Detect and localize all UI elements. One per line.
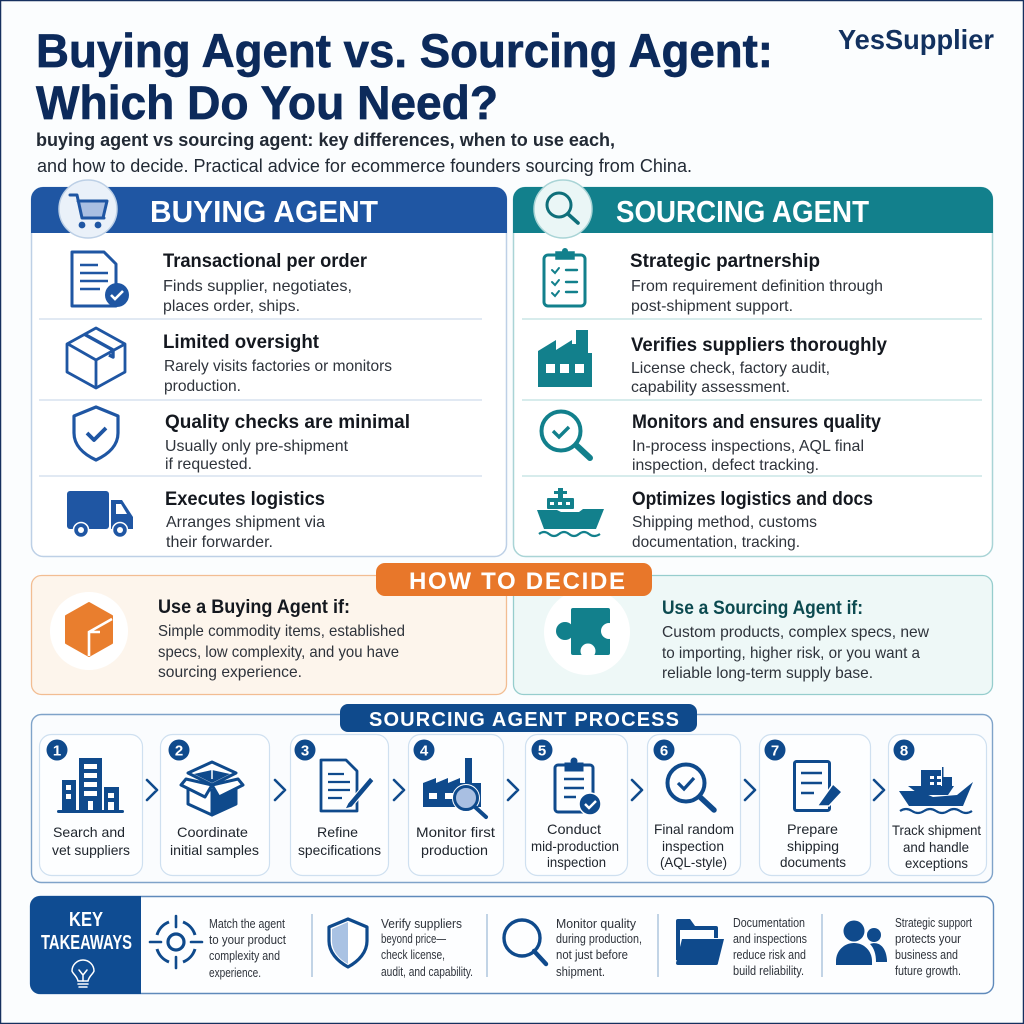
step 7 label: Prepare: [787, 821, 838, 837]
step 5: icon clipboard with check: [555, 758, 601, 815]
subtitle: and how to decide. Practical advice for ecommerce founders sourcing from China.: [37, 155, 692, 176]
panel: key takeaways: [30, 896, 994, 994]
takeaway 4: reduce risk and: [733, 948, 806, 962]
step number badges: 7: [771, 742, 779, 760]
logo: YesSupplier: YesSupplier: [838, 24, 994, 55]
step 7 label: [780, 821, 846, 870]
key takeaways label block: KEY: [69, 909, 104, 931]
takeaway 4: Documentation: [733, 916, 805, 930]
step 4: icon factory and magnifier: [423, 758, 486, 817]
icon: shield with check: [74, 407, 118, 460]
item: limited oversight: Limited oversight: [163, 332, 320, 353]
item: monitors and ensures quality: [632, 412, 881, 474]
title: Which Do You Need?: [36, 76, 498, 129]
takeaway 3: [556, 917, 642, 979]
takeaway 1: to your product: [209, 933, 286, 947]
sourcing agent heading: SOURCING AGENT: [616, 194, 869, 229]
item: executes logistics: Executes logistics: [165, 489, 325, 510]
step 8 label: and handle: [903, 839, 969, 855]
step number badges: 6: [660, 742, 668, 760]
panel: buying agent: [31, 180, 507, 556]
icon: truck: [67, 491, 133, 538]
subtitle: [36, 129, 692, 176]
step 4 label: Monitor first: [416, 824, 495, 840]
item: optimizes logistics and docs: Shipping method, customs: [632, 514, 817, 531]
takeaway 1: Match the agent: [209, 917, 285, 931]
item: transactional per order: [163, 251, 368, 315]
takeaway 2: Verify suppliers: [381, 917, 462, 931]
item: optimizes logistics and docs: [632, 489, 873, 551]
item: executes logistics: their forwarder.: [166, 534, 273, 551]
step 3: icon document and pencil: [321, 760, 374, 811]
item: strategic partnership: From requirement definition through: [631, 278, 883, 295]
icon: cargo ship: [537, 488, 604, 536]
key takeaways label block: TAKEAWAYS: [41, 932, 132, 954]
step number badges: 1: [53, 742, 61, 760]
item: strategic partnership: post-shipment support.: [631, 298, 793, 315]
icon: puzzle piece: [544, 589, 630, 675]
process badge: SOURCING AGENT PROCESS: [369, 709, 679, 731]
takeaway 5: future growth.: [895, 964, 961, 978]
item: strategic partnership: Strategic partnership: [630, 251, 820, 272]
item: quality checks are minimal: Usually only pre-shipment: [165, 438, 349, 455]
takeaway 3: during production,: [556, 932, 642, 946]
step 2 label: [170, 824, 259, 858]
item: verifies suppliers thoroughly: License check, factory audit,: [631, 360, 830, 377]
step 2: icon open box: [181, 762, 243, 815]
buying agent advice: [158, 597, 405, 681]
step 6 label: (AQL-style): [660, 854, 727, 870]
takeaway 1: [209, 917, 286, 980]
takeaway 5: protects your: [895, 932, 961, 946]
buying agent advice: sourcing experience.: [158, 664, 302, 681]
takeaway 4: and inspections: [733, 932, 807, 946]
item: optimizes logistics and docs: documentation, tracking.: [632, 534, 800, 551]
icon: factory: [538, 330, 592, 387]
step number badges: 3: [301, 742, 309, 760]
step 5 label: inspection: [547, 854, 606, 870]
takeaway 2: audit, and capability.: [381, 965, 473, 979]
step 7: icon document and pen: [794, 762, 842, 810]
step cards: [40, 734, 986, 876]
buying agent advice: specs, low complexity, and you have: [158, 644, 399, 661]
step 8 label: [892, 822, 981, 871]
item: verifies suppliers thoroughly: [631, 335, 887, 396]
buying agent advice: Use a Buying Agent if:: [158, 597, 350, 618]
icon: shopping cart: [59, 180, 117, 238]
panel: use a sourcing agent: [514, 576, 992, 694]
item: executes logistics: [165, 489, 325, 551]
step 2 label: Coordinate: [177, 824, 248, 840]
title: Buying Agent vs. Sourcing Agent:: [36, 24, 773, 77]
buying agent heading: BUYING AGENT: [150, 194, 378, 229]
how to decide badge: [376, 563, 652, 596]
takeaway 1: experience.: [209, 966, 261, 980]
step arrows: [147, 780, 884, 800]
step 8 label: exceptions: [905, 855, 968, 871]
item: monitors and ensures quality: inspection, defect tracking.: [632, 457, 819, 474]
panel: sourcing agent: [513, 180, 993, 556]
item: transactional per order: places order, ships.: [163, 298, 300, 315]
step 5 label: Conduct: [547, 821, 601, 837]
process badge: [340, 704, 697, 732]
key takeaways label block: [30, 896, 141, 994]
step 6 label: inspection: [662, 838, 724, 854]
item: executes logistics: Arranges shipment via: [166, 514, 325, 531]
step number badges: [46, 740, 914, 760]
icon: people: [836, 920, 887, 965]
step 2 label: initial samples: [170, 842, 259, 858]
step 4 label: production: [421, 842, 488, 858]
takeaway 2: beyond price—: [381, 932, 446, 946]
item: monitors and ensures quality: In-process inspections, AQL final: [632, 438, 864, 455]
step 1: icon buildings: [57, 758, 124, 813]
step 1 label: [52, 824, 130, 858]
step 7 label: shipping: [787, 838, 839, 854]
item: transactional per order: Transactional per order: [163, 251, 368, 272]
item: limited oversight: Rarely visits factories or monitors: [164, 358, 392, 375]
icon: folder: [676, 919, 724, 965]
icon: quality magnifier: [542, 412, 590, 458]
sourcing agent advice: reliable long-term supply base.: [662, 665, 873, 682]
how to decide badge: HOW TO DECIDE: [409, 568, 625, 595]
sourcing agent header bar: [513, 187, 993, 233]
step 4 label: [416, 824, 495, 858]
takeaway 3: shipment.: [556, 965, 605, 979]
takeaway 3: Monitor quality: [556, 917, 637, 931]
step 1 label: vet suppliers: [52, 842, 130, 858]
step 7 label: documents: [780, 854, 846, 870]
icon: magnifier: [534, 180, 592, 238]
item: quality checks are minimal: Quality checks are minimal: [165, 412, 410, 433]
takeaway 2: check license,: [381, 948, 445, 962]
step 8 label: Track shipment: [892, 822, 981, 838]
takeaway 2: [381, 917, 473, 979]
takeaway 4: [733, 916, 807, 978]
sourcing agent advice: to importing, higher risk, or you want a: [662, 645, 920, 662]
icon: orange box: [50, 592, 128, 670]
item: monitors and ensures quality: Monitors and ensures quality: [632, 412, 881, 433]
icon: magnifier: [504, 920, 546, 964]
buying agent advice: Simple commodity items, established: [158, 623, 405, 640]
step 5 label: [531, 821, 619, 870]
step 1 label: Search and: [53, 824, 125, 840]
step number badges: 5: [538, 742, 546, 760]
step 6 label: [654, 821, 734, 870]
icon: target: [150, 916, 202, 968]
takeaway 4: build reliability.: [733, 964, 804, 978]
icon: clipboard checklist: [544, 248, 585, 306]
item: strategic partnership: [630, 251, 883, 315]
item: verifies suppliers thoroughly: capability assessment.: [631, 379, 790, 396]
step 3 label: [298, 824, 381, 858]
step 6: icon magnifier with check: [668, 764, 714, 810]
step 3 label: Refine: [317, 824, 358, 840]
item: limited oversight: production.: [164, 378, 241, 395]
buying agent header bar: [31, 187, 507, 233]
subtitle: buying agent vs sourcing agent: key differences, when to use each,: [36, 129, 615, 150]
takeaway 3: not just before: [556, 948, 628, 962]
sourcing agent advice: Use a Sourcing Agent if:: [662, 598, 863, 619]
panel: sourcing agent process: [32, 704, 992, 882]
step 6 label: Final random: [654, 821, 734, 837]
item: verifies suppliers thoroughly: Verifies suppliers thoroughly: [631, 335, 887, 356]
icon: light bulb: [72, 960, 94, 987]
takeaway 5: [895, 916, 972, 978]
step 3 label: specifications: [298, 842, 381, 858]
step number badges: 8: [900, 742, 908, 760]
step number badges: 4: [420, 742, 429, 760]
step 8: icon ship: [899, 767, 973, 813]
item: transactional per order: Finds supplier, negotiates,: [163, 278, 352, 295]
icon: box: [67, 328, 125, 388]
step 5 label: mid-production: [531, 838, 619, 854]
item: quality checks are minimal: [165, 412, 410, 473]
icon: shield: [329, 919, 367, 967]
sourcing agent advice: Custom products, complex specs, new: [662, 624, 929, 641]
takeaway 1: complexity and: [209, 949, 280, 963]
item: limited oversight: [163, 332, 392, 395]
title: [36, 24, 773, 129]
icon: document with check: [72, 252, 129, 307]
sourcing agent advice: [662, 598, 929, 682]
takeaway 5: business and: [895, 948, 958, 962]
item: quality checks are minimal: if requested.: [165, 456, 252, 473]
takeaway 5: Strategic support: [895, 916, 972, 930]
step number badges: 2: [175, 742, 183, 760]
panel: use a buying agent: [32, 576, 506, 694]
item: optimizes logistics and docs: Optimizes logistics and docs: [632, 489, 873, 510]
